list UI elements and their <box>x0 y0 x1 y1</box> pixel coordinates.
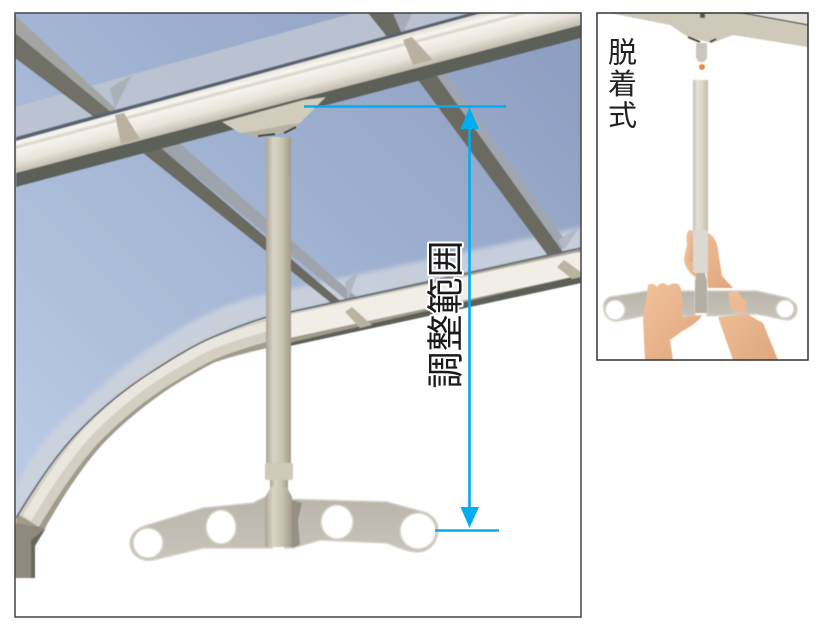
front hand <box>643 283 702 360</box>
label: detachable: 式 <box>608 100 637 132</box>
ceiling bracket <box>222 97 326 137</box>
inset hub <box>695 273 707 313</box>
label: detachable: 脱 <box>608 36 637 70</box>
left arm <box>130 497 272 560</box>
detachable peg <box>696 43 707 70</box>
fingers of back hand <box>689 236 693 262</box>
panel: main photo with adjustment range <box>15 0 582 617</box>
rafter left upper <box>16 16 132 117</box>
adjusting collar <box>265 463 293 480</box>
back hand <box>684 230 733 288</box>
telescopic pole <box>266 137 291 464</box>
label: adjustment range: 調整範囲 <box>426 240 466 388</box>
forearm behind arm <box>718 291 778 360</box>
panel: detachable inset photo <box>597 12 808 360</box>
hanger pole and T-bar <box>130 97 438 560</box>
sky seen through roof <box>15 13 581 530</box>
inset telescopic pole <box>693 80 708 273</box>
inset photo content <box>604 12 808 360</box>
adjustment range dimension arrow <box>304 106 506 530</box>
rafter left lower <box>143 144 358 303</box>
carport roof structure <box>15 0 582 578</box>
label: detachable: 着 <box>608 68 637 101</box>
upper beam <box>16 13 581 187</box>
rafter right lower <box>418 74 580 268</box>
inset border <box>597 13 808 360</box>
center hub <box>265 487 292 547</box>
right arm <box>285 499 438 552</box>
inset T-bar arms <box>604 291 695 321</box>
translucent glazing band upper <box>16 14 468 137</box>
curved lower beam <box>16 248 581 528</box>
inset ceiling beam <box>610 12 808 47</box>
main panel border <box>15 13 581 617</box>
rafter right upper <box>368 14 412 36</box>
beam end post <box>15 523 46 578</box>
translucent glazing band lower <box>16 227 582 518</box>
label: detachable <box>608 36 637 132</box>
